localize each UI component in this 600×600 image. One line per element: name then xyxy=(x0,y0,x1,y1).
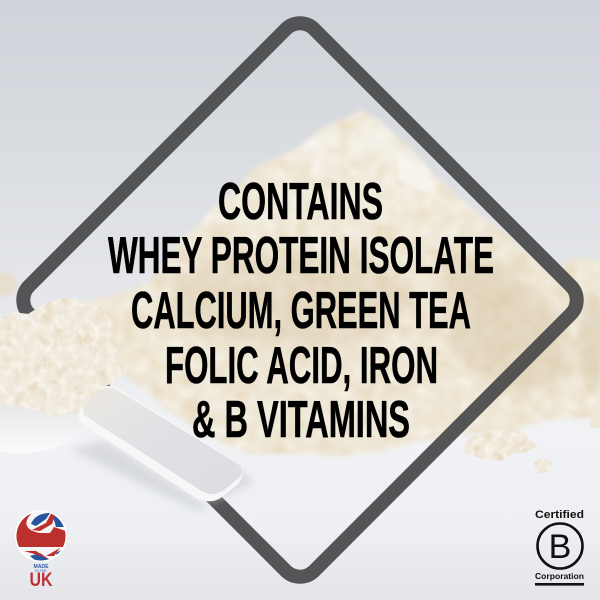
pile warm shadow centre xyxy=(165,250,415,350)
b corporation badge xyxy=(535,509,584,586)
scoop handle xyxy=(78,386,242,501)
line: contains: CONTAINS xyxy=(218,173,383,231)
powder pile xyxy=(0,110,600,473)
scoop shadow xyxy=(70,440,255,512)
scoop handle top face xyxy=(82,388,242,494)
globe flag icon xyxy=(15,510,67,562)
certified label: Certified xyxy=(535,509,584,521)
pile warm shadow far right xyxy=(578,295,600,395)
pile body xyxy=(92,110,600,456)
scoop xyxy=(0,298,255,512)
near crumbs xyxy=(462,428,538,461)
underline bar xyxy=(535,583,584,586)
pile warm shadow right xyxy=(440,250,575,395)
powder heap in scoop xyxy=(0,298,124,416)
right edge crumb xyxy=(590,400,600,428)
pile bright facet xyxy=(395,150,438,192)
scoop bowl xyxy=(0,395,86,453)
corporation label: Corporation xyxy=(535,571,584,581)
uk label: UK xyxy=(30,570,53,591)
in the label: IN THE xyxy=(35,569,47,573)
made label: MADE xyxy=(34,564,49,570)
b circle logo: B xyxy=(549,528,571,566)
small crumb xyxy=(534,457,552,473)
made in the uk badge xyxy=(15,510,67,591)
headline text xyxy=(108,173,494,449)
distant powder left xyxy=(0,272,17,296)
line: b vitamins: & B VITAMINS xyxy=(192,391,410,449)
